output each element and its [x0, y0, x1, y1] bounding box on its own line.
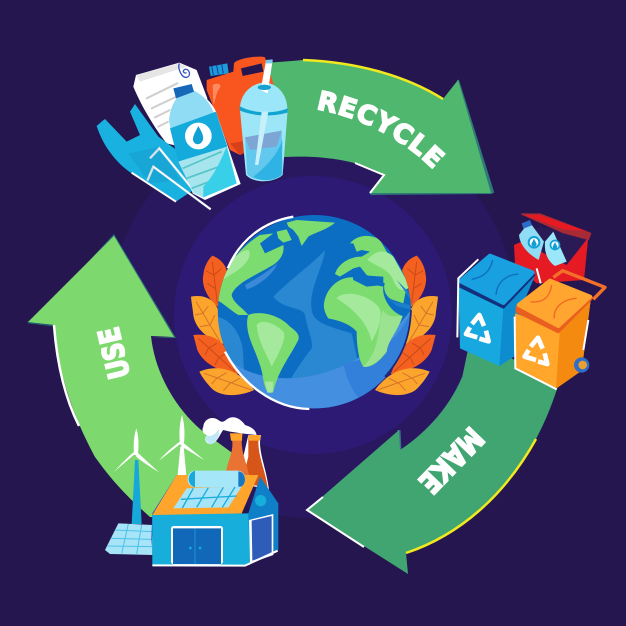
icon: bent straws: [147, 148, 211, 209]
land: europe: [335, 236, 407, 303]
land: greenland and arctic: [277, 220, 335, 246]
leaves: right: [375, 256, 438, 395]
leaves: left: [191, 256, 254, 395]
icon: factory building: [151, 471, 278, 566]
icon: ground solar panel: [105, 523, 152, 555]
circular economy infographic: [26, 56, 607, 574]
icon: wind turbine white: [159, 415, 204, 475]
icon: wind turbine blue: [113, 428, 159, 524]
sea: red sea: [386, 296, 410, 310]
background rings: [110, 112, 516, 518]
land: north america: [217, 233, 284, 315]
arrow: recycle: [270, 58, 494, 195]
icon: plastic bag, paper, bottle, jerrycan, cup: [97, 57, 288, 209]
label: recycle: RECYCLE: [317, 90, 446, 170]
icon: orange bin: [515, 271, 605, 389]
label: make: MAKE: [411, 420, 490, 499]
icon: stack of papers: [133, 63, 207, 147]
icon: red bin: [514, 214, 591, 283]
land: south america: [247, 313, 299, 393]
icon: blue bin: [457, 256, 535, 366]
icon: bottles in red bin: [519, 222, 544, 260]
icon: water bottle: [168, 84, 241, 200]
arrow: make: [307, 340, 560, 574]
icon: plastic bag: [97, 104, 211, 209]
icon: recycling bins: [457, 214, 605, 389]
ocean light patches: [217, 250, 358, 380]
label: use: USE: [92, 324, 138, 382]
icon: recycle symbol orange: [525, 338, 547, 364]
icon: recycle symbol blue: [466, 315, 489, 341]
icon: drinking cup: [239, 59, 288, 181]
icon: factory, turbines, solar: [105, 415, 278, 566]
arrow: use: [28, 234, 235, 522]
land: africa: [324, 277, 403, 367]
icon: chimneys and smoke: [202, 417, 269, 490]
icon: jerrycan: [207, 57, 273, 155]
earth globe: [213, 210, 417, 413]
